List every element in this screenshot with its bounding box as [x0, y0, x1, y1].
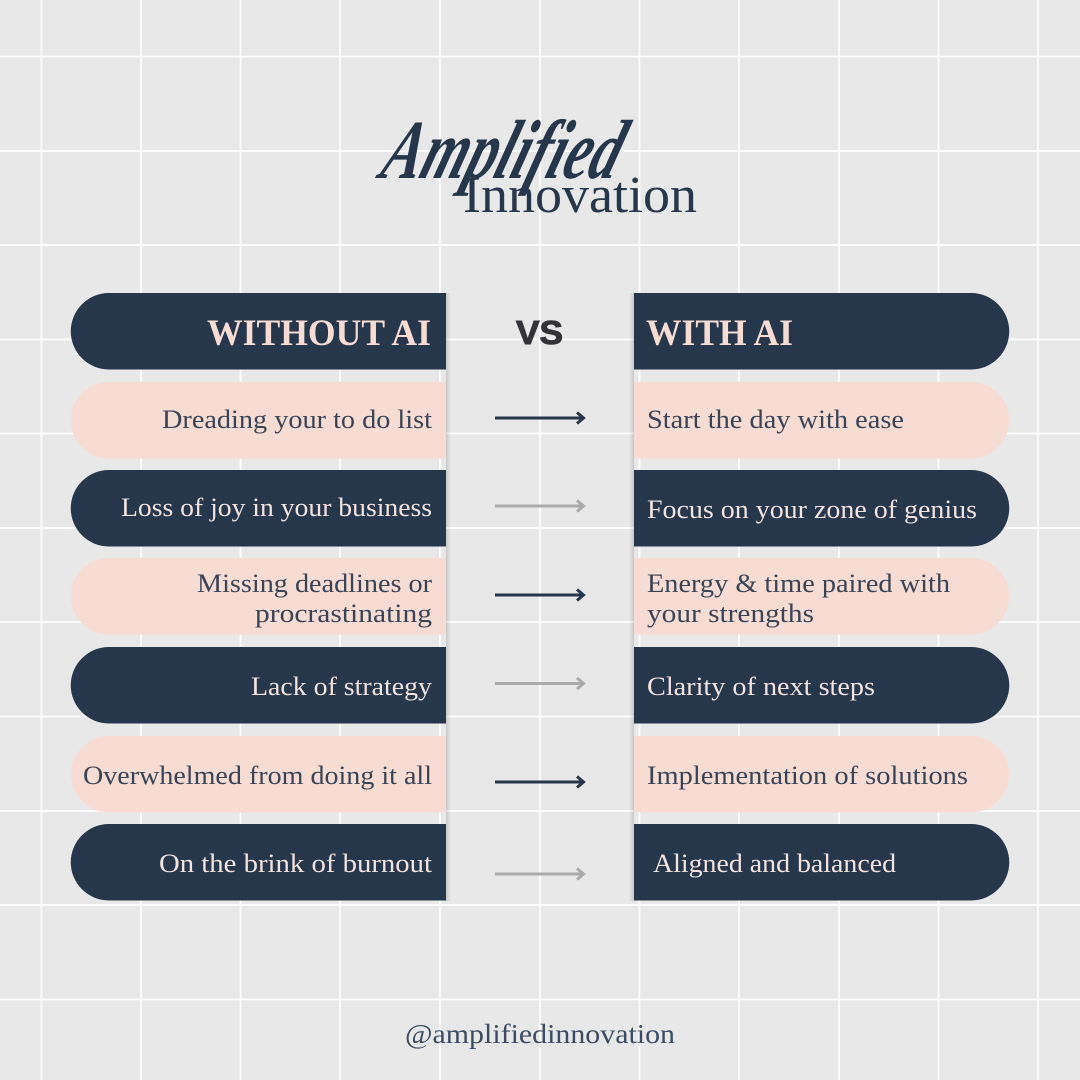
arrow: row 5: [495, 776, 584, 788]
arrow: row 3: [495, 590, 584, 600]
row: On the brink of burnout: [71, 824, 446, 900]
row: Energy and time paired with your strengths: [634, 558, 1009, 634]
row: Clarity of next steps: [634, 647, 1009, 724]
arrow: row 1: [495, 412, 584, 424]
row: Start the day with ease: [634, 382, 1009, 458]
row: Focus on your zone of genius: [634, 470, 1009, 546]
arrow: row 6: [495, 868, 584, 880]
row: Energy and time paired with your strengths: Energy & time paired with: [647, 569, 950, 598]
heading: VS: VS: [516, 314, 563, 351]
row: On the brink of burnout: On the brink of burnout: [159, 849, 433, 878]
row: Dreading your to do list: [71, 382, 446, 458]
footer handle: @amplifiedinnovation: [405, 1019, 676, 1049]
row: Aligned and balanced: [634, 824, 1009, 900]
row: Overwhelmed from doing it all: [71, 736, 446, 812]
row: Implementation of solutions: [634, 736, 1009, 812]
script word: Amplified: Amplified: [369, 103, 640, 197]
row: Loss of joy in your business: [71, 470, 446, 546]
row: Dreading your to do list: Dreading your to do list: [162, 405, 433, 434]
row: Implementation of solutions: Implementation of solutions: [647, 761, 968, 790]
row: Overwhelmed from doing it all: Overwhelmed from doing it all: [83, 761, 432, 790]
row: Energy and time paired with your strengths: your strengths: [647, 599, 814, 628]
header: Without AI: WITHOUT AI: [207, 313, 431, 354]
arrow: row 2: [495, 500, 584, 512]
header: With AI: WITH AI: [646, 313, 793, 354]
row: Missing deadlines or procrastinating: [71, 558, 446, 634]
row: Start the day with ease: Start the day with ease: [647, 405, 904, 434]
panel: Without AI column: [71, 293, 446, 900]
panel: With AI column: [634, 293, 1009, 900]
row: Clarity of next steps: Clarity of next steps: [647, 672, 875, 701]
header: Without AI: [71, 293, 446, 370]
row: Missing deadlines or procrastinating: procrastinating: [255, 599, 432, 628]
row: Focus on your zone of genius: Focus on your zone of genius: [647, 495, 977, 524]
row: Loss of joy in your business: Loss of joy in your business: [121, 493, 432, 522]
row: Lack of strategy: [71, 647, 446, 724]
serif word: Innovation: Innovation: [463, 167, 697, 224]
arrow: row 4: [495, 678, 584, 689]
header: With AI: [634, 293, 1009, 370]
row: Missing deadlines or procrastinating: Missing deadlines or: [197, 569, 432, 598]
title: Amplified Innovation logo: [369, 103, 697, 224]
row: Lack of strategy: Lack of strategy: [251, 672, 432, 701]
row: Aligned and balanced: Aligned and balanced: [653, 849, 896, 878]
